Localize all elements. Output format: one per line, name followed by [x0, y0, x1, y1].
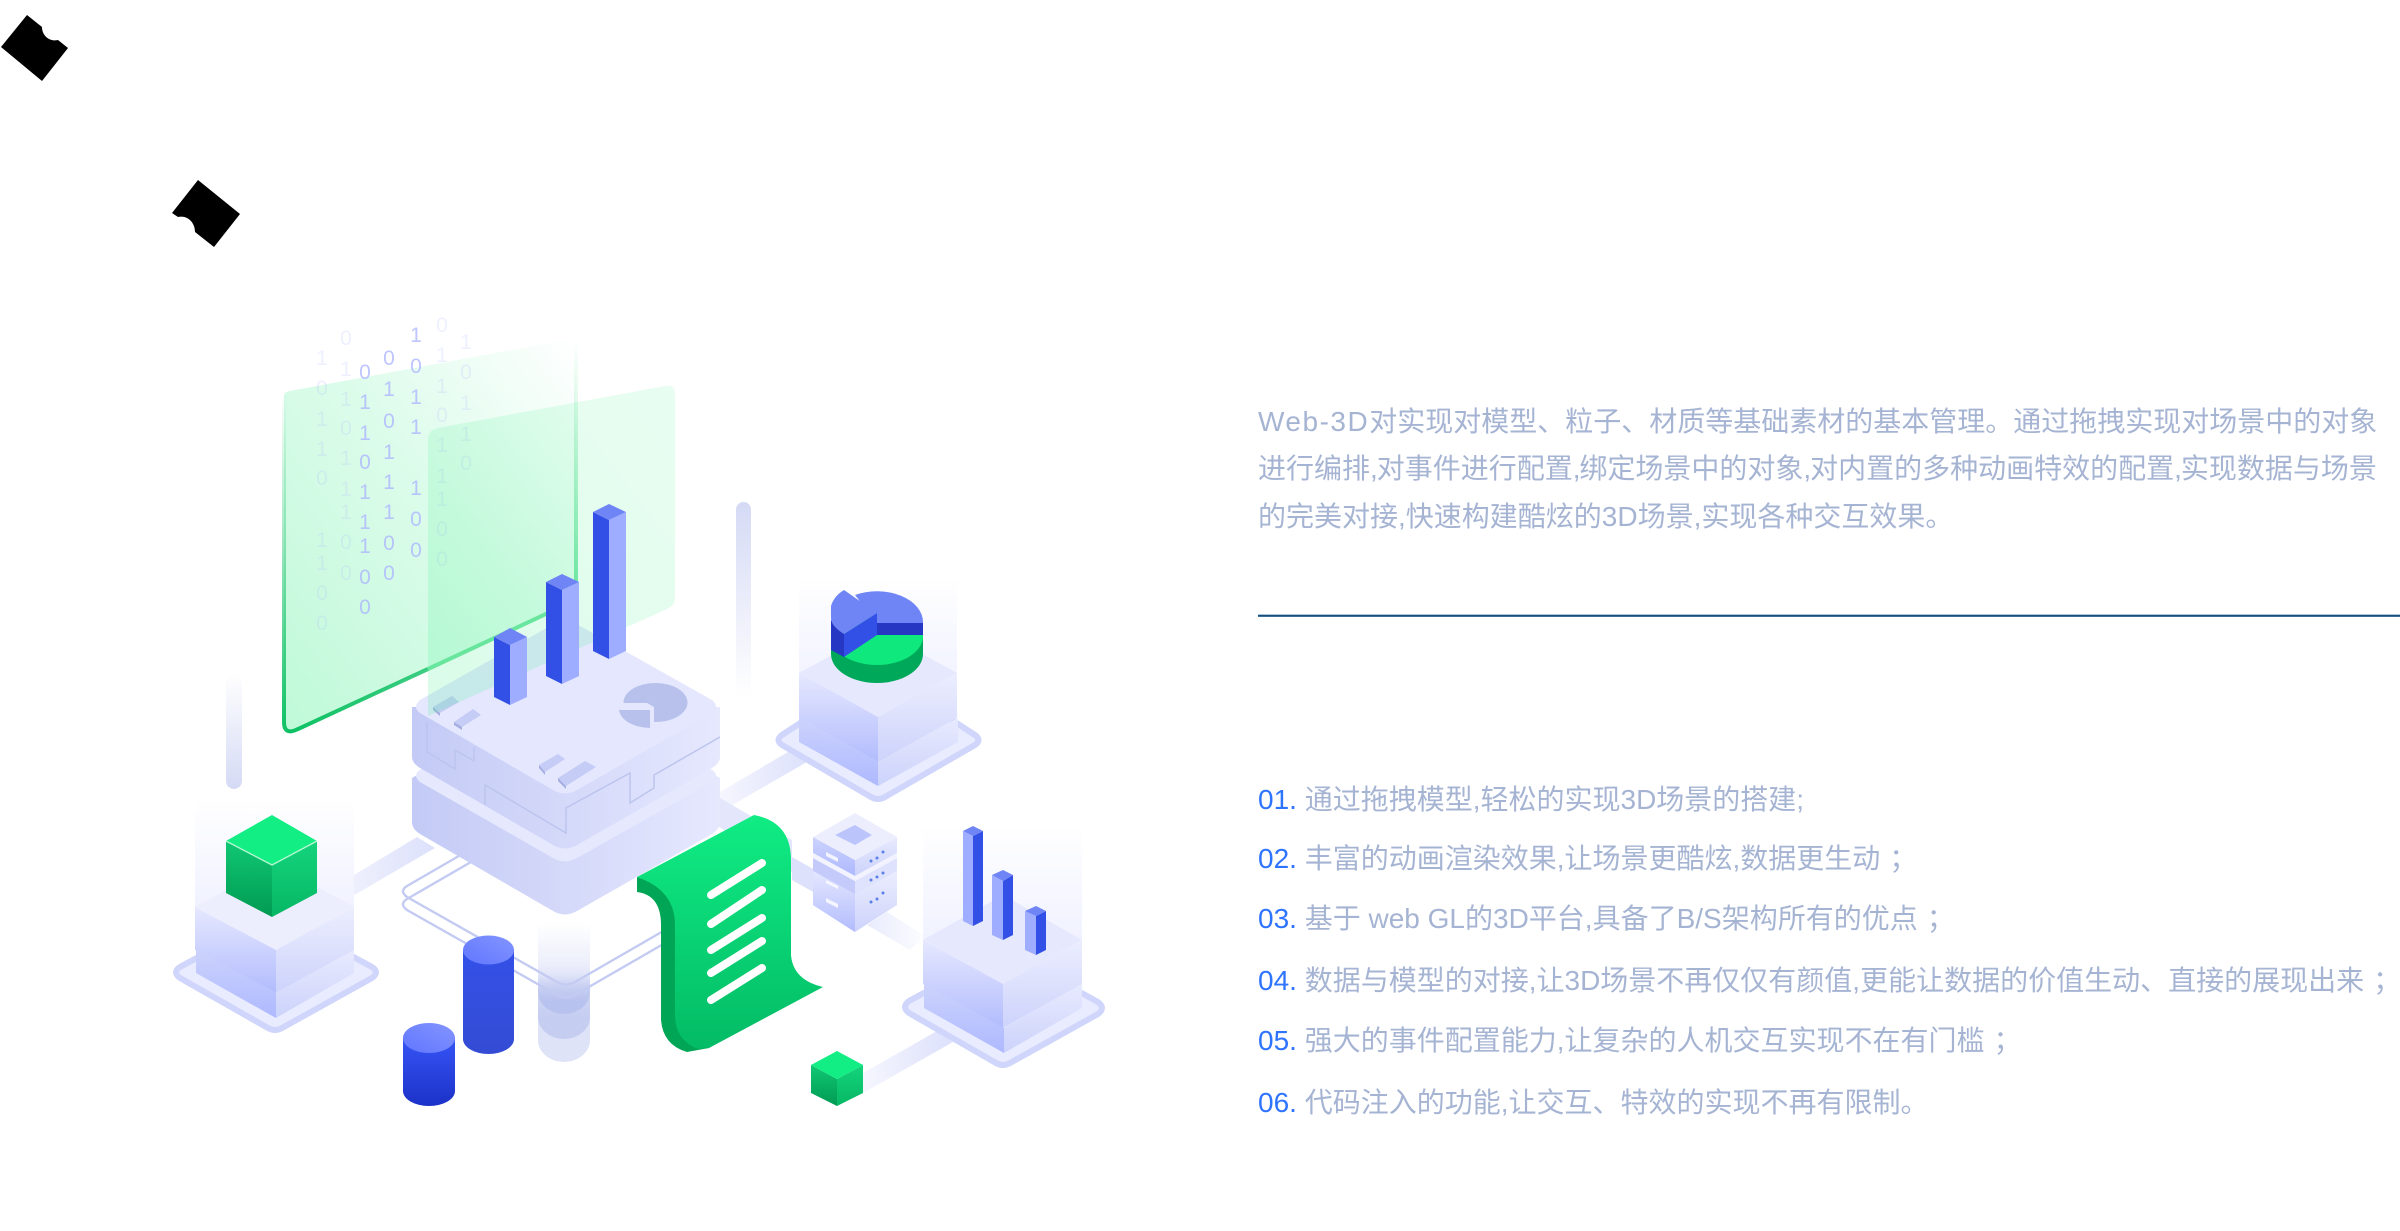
binary digit columns: 0 [359, 566, 371, 589]
binary digit columns: 1 [383, 441, 395, 464]
binary digit columns: 0 [383, 347, 395, 370]
item 01: 01. 通过拖拽模型,轻松的实现3D场景的搭建; [1258, 784, 1804, 815]
binary digit columns: 1 [383, 378, 395, 401]
item 06: 06. 代码注入的功能,让交互、特效的实现不再有限制。 [1258, 1087, 1928, 1118]
feature list [1258, 784, 2400, 1118]
item 03: 03. 基于 web GL的3D平台,具备了B/S架构所有的优点 ； [1258, 903, 1955, 934]
binary digit columns: 0 [383, 532, 395, 555]
double outline rails [403, 838, 665, 998]
binary digit columns: 1 [340, 358, 352, 381]
green document [637, 815, 823, 1052]
binary digit columns: 0 [436, 404, 448, 427]
binary digit columns: 1 [410, 477, 422, 500]
binary digit columns [316, 314, 472, 635]
binary digit columns: 0 [436, 548, 448, 571]
binary digit columns: 1 [460, 331, 472, 354]
binary digit columns: 1 [340, 478, 352, 501]
binary digit columns: 0 [316, 467, 328, 490]
binary digit columns: 0 [410, 539, 422, 562]
binary digit columns: 1 [340, 501, 352, 524]
centre bar chart [494, 504, 626, 705]
binary digit columns: 1 [359, 391, 371, 414]
left pedestal with green cube [176, 800, 376, 1030]
binary digit columns: 0 [340, 327, 352, 350]
binary digit columns: 0 [316, 612, 328, 635]
binary digit columns: 0 [436, 518, 448, 541]
binary digit columns: 1 [359, 422, 371, 445]
tall blue cylinder [463, 936, 514, 1054]
binary digit columns: 1 [383, 471, 395, 494]
green cube [226, 815, 317, 917]
item 02: 02. 丰富的动画渲染效果,让场景更酷炫,数据更生动 ； [1258, 843, 1917, 874]
right pedestal with 3D pie [778, 577, 978, 799]
binary digit columns: 1 [383, 501, 395, 524]
icon: black notched tag lower [172, 180, 240, 247]
platform pie mark [619, 683, 687, 728]
binary digit columns: 0 [383, 562, 395, 585]
binary digit columns: 1 [436, 488, 448, 511]
binary digit columns: 0 [340, 417, 352, 440]
binary digit columns: 1 [410, 416, 422, 439]
short blue cylinder [403, 1023, 455, 1106]
descending bar chart [963, 826, 1046, 955]
binary digit columns: 1 [316, 408, 328, 431]
binary digit columns: 0 [460, 361, 472, 384]
central platform [412, 620, 720, 914]
binary digit columns: 1 [359, 481, 371, 504]
binary digit columns: 1 [410, 386, 422, 409]
icon: black notched tag top-left [1, 15, 68, 81]
binary digit columns: 1 [316, 347, 328, 370]
binary digit columns: 1 [340, 388, 352, 411]
binary digit columns: 1 [436, 375, 448, 398]
binary digit columns: 1 [316, 529, 328, 552]
3D pie chart [831, 590, 923, 683]
binary digit columns: 1 [316, 552, 328, 575]
intro paragraph [1258, 406, 2377, 532]
binary digit columns: 0 [359, 361, 371, 384]
intro paragraph: 的完美对接,快速构建酷炫的3D场景,实现各种交互效果。 [1258, 501, 1953, 532]
binary digit columns: 0 [359, 596, 371, 619]
binary digit columns: 0 [410, 355, 422, 378]
binary digit columns: 0 [383, 410, 395, 433]
platform upper layer [412, 620, 720, 848]
ghost cylinder stack under platform [538, 923, 590, 1062]
binary digit columns: 0 [340, 562, 352, 585]
binary digit columns: 1 [410, 324, 422, 347]
connector strips [316, 752, 953, 1093]
intro paragraph: Web-3D对实现对模型、粒子、材质等基础素材的基本管理。通过拖拽实现对场景中的对象 [1258, 406, 2377, 437]
binary digit columns: 0 [410, 508, 422, 531]
front translucent green screen [428, 386, 675, 716]
vertical light pill left [226, 673, 242, 789]
binary digit columns: 0 [460, 452, 472, 475]
divider line [1258, 614, 2400, 617]
back translucent green screen [284, 338, 576, 731]
platform small keys [433, 696, 596, 789]
small green cube [811, 1051, 863, 1106]
binary digit columns: 0 [359, 451, 371, 474]
binary digit columns: 1 [359, 511, 371, 534]
binary digit columns: 1 [359, 535, 371, 558]
document text lines [711, 863, 762, 1000]
binary digit columns: 1 [436, 344, 448, 367]
intro paragraph: 进行编排,对事件进行配置,绑定场景中的对象,对内置的多种动画特效的配置,实现数据与场景 [1258, 453, 2377, 484]
circuit lines [427, 722, 720, 833]
binary digit columns: 0 [340, 531, 352, 554]
binary digit columns: 1 [460, 392, 472, 415]
server stack [813, 813, 897, 932]
binary digit columns: 1 [316, 438, 328, 461]
platform lower layer [412, 690, 720, 914]
binary digit columns: 1 [460, 423, 472, 446]
binary digit columns: 1 [436, 465, 448, 488]
binary digit columns: 0 [436, 314, 448, 337]
lower-right pedestal with bars [905, 825, 1102, 1065]
binary digit columns: 0 [316, 377, 328, 400]
binary digit columns: 1 [436, 434, 448, 457]
item 04: 04. 数据与模型的对接,让3D场景不再仅仅有颜值,更能让数据的价值生动、直接的展现出来 ； [1258, 965, 2400, 996]
binary digit columns: 1 [340, 447, 352, 470]
binary digit columns: 0 [316, 582, 328, 605]
vertical light pill right [736, 502, 751, 697]
item 05: 05. 强大的事件配置能力,让复杂的人机交互实现不在有门槛 ； [1258, 1025, 2022, 1056]
